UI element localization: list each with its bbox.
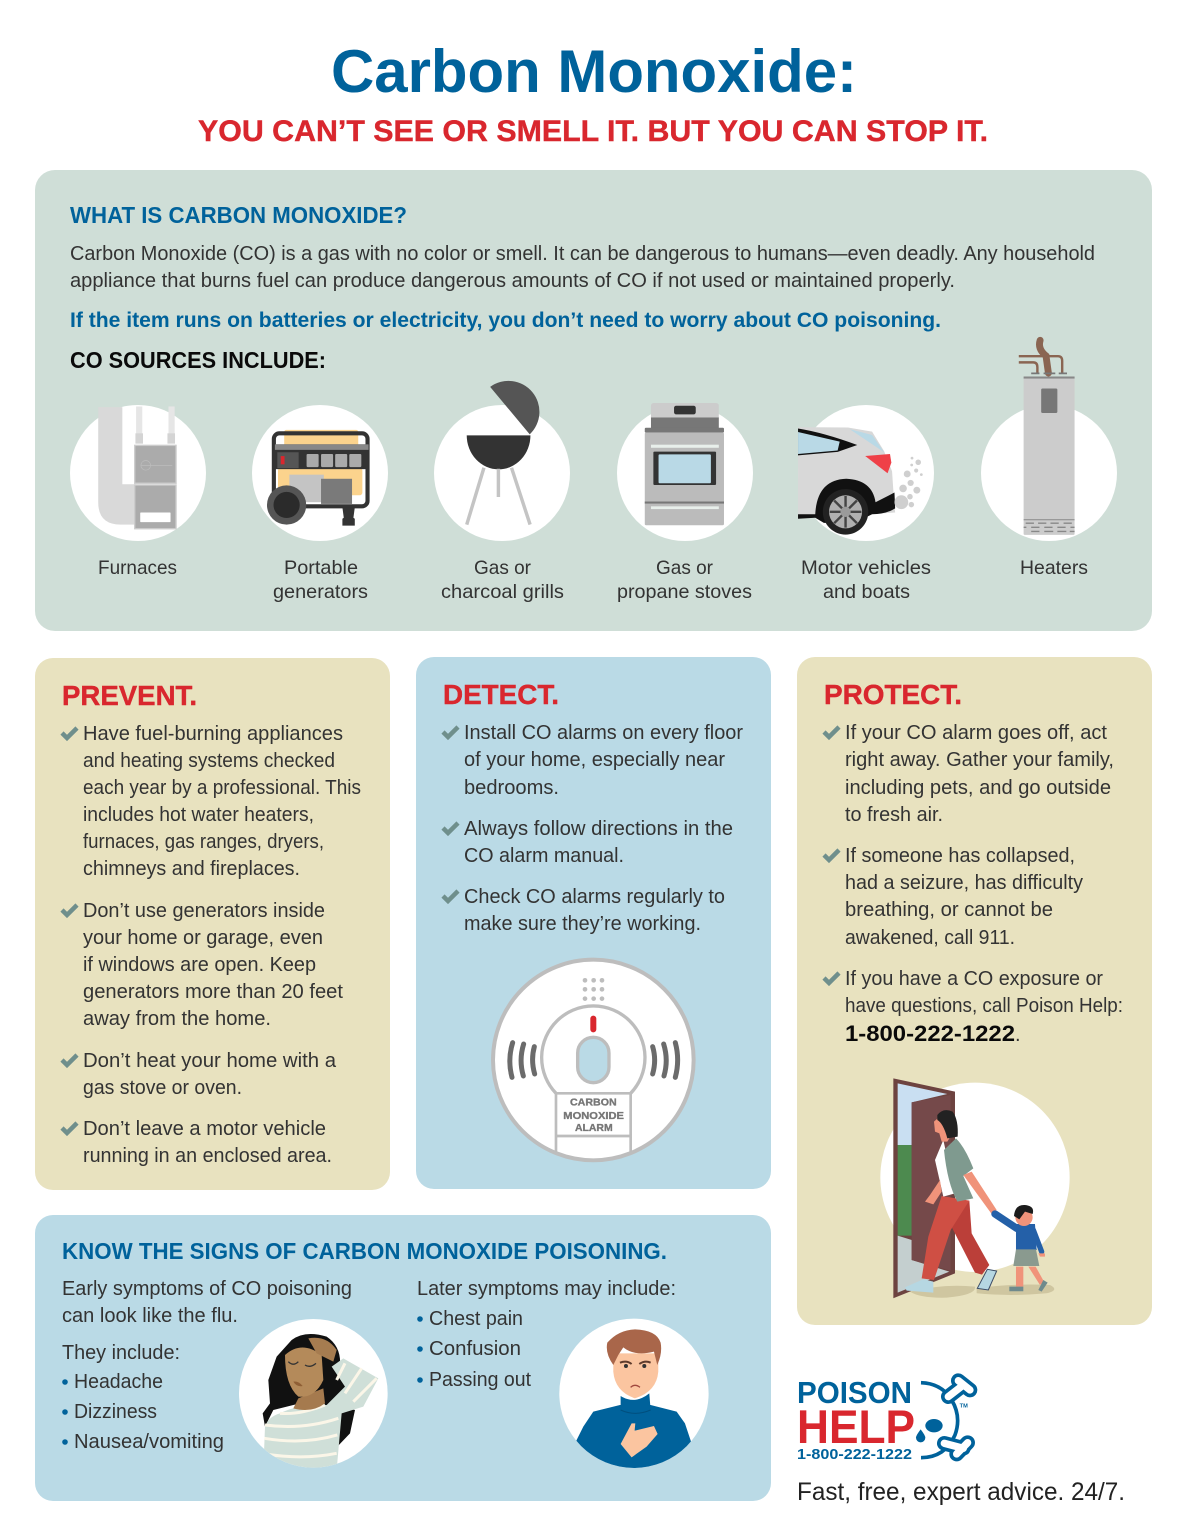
- icon: skull and crossbones: [916, 1381, 970, 1458]
- title: Carbon Monoxide:: [331, 38, 857, 105]
- checklist: prevent: Don’t leave a motor vehicle: [83, 1118, 326, 1140]
- label: stoves: [617, 557, 752, 603]
- checklist: protect: right away. Gather your family,: [845, 749, 1114, 771]
- label: portable generators: [273, 557, 368, 603]
- callout: batteries or electricity: If the item runs on batteries or electricity, you don’t need to worry about CO poisoning.: [70, 309, 941, 332]
- checklist: prevent: gas stove or oven.: [83, 1077, 242, 1099]
- panel: what is carbon monoxide: [35, 170, 1152, 631]
- checklist: prevent: includes hot water heaters,: [83, 804, 314, 826]
- illustration: carbon monoxide alarm: MONOXIDE: [563, 1111, 624, 1122]
- label: motor vehicles: Motor vehicles: [801, 557, 931, 579]
- label: portable generators: generators: [273, 581, 368, 603]
- text block: early symptoms: Dizziness: [74, 1401, 157, 1423]
- label: motor vehicles: [801, 557, 931, 603]
- checklist: protect: awakened, call 911.: [845, 927, 1015, 949]
- checklist: protect: 1-800-222-1222: [845, 1021, 1015, 1046]
- checklist: prevent: running in an enclosed area.: [83, 1145, 332, 1167]
- checklist: protect: including pets, and go outside: [845, 777, 1111, 799]
- text block: definition: [70, 243, 1095, 292]
- illustration: woman and child leaving through door: [880, 1078, 1070, 1298]
- checklist: prevent: Don’t heat your home with a: [83, 1050, 337, 1072]
- checklist: protect: had a seizure, has difficulty: [845, 872, 1083, 894]
- label: stoves: Gas or: [656, 557, 713, 579]
- heading: CO sources include: CO SOURCES INCLUDE:: [70, 347, 326, 373]
- logo: poison help: [797, 1375, 970, 1463]
- heading: know the signs: KNOW THE SIGNS OF CARBON MONOXIDE POISONING.: [62, 1238, 667, 1264]
- checklist: prevent: chimneys and fireplaces.: [83, 858, 300, 880]
- illustration: carbon monoxide alarm: CARBON: [570, 1098, 617, 1109]
- label: furnaces: Furnaces: [98, 557, 177, 579]
- checklist: detect: bedrooms.: [464, 777, 559, 799]
- source: portable generators: [252, 405, 388, 541]
- illustration: carbon monoxide alarm: ALARM: [575, 1123, 613, 1134]
- text block: later symptoms: Chest pain: [429, 1308, 523, 1330]
- source: gas or propane stoves: [617, 403, 753, 541]
- illustration: woman with headache: [239, 1319, 388, 1470]
- label: grills: charcoal grills: [441, 581, 564, 603]
- checklist: protect: If your CO alarm goes off, act: [845, 722, 1107, 744]
- panel: know the signs: [35, 1215, 771, 1501]
- checklist: prevent: Don’t use generators inside: [83, 900, 325, 922]
- text block: early symptoms: can look like the flu.: [62, 1305, 238, 1327]
- checklist: detect: make sure they’re working.: [464, 913, 701, 935]
- logo: poison help: HELP: [797, 1400, 915, 1453]
- text block: early symptoms: Early symptoms of CO poisoning: [62, 1278, 352, 1300]
- text block: later symptoms: Confusion: [429, 1338, 521, 1360]
- icon: skull and crossbones: TM: [960, 1403, 968, 1409]
- checklist: detect: Always follow directions in the: [464, 818, 733, 840]
- checklist: protect: If you have a CO exposure or: [845, 968, 1103, 990]
- checklist: prevent: if windows are open. Keep: [83, 954, 316, 976]
- text block: definition: appliance that burns fuel can produce dangerous amounts of CO if not used or maintained properly.: [70, 270, 955, 292]
- checklist: detect: of your home, especially near: [464, 749, 725, 771]
- text block: later symptoms: [417, 1278, 676, 1391]
- panel: detect: [416, 657, 771, 1189]
- heading: what is carbon monoxide: WHAT IS CARBON MONOXIDE?: [70, 202, 407, 228]
- illustration: carbon monoxide alarm: [493, 960, 694, 1160]
- source: motor vehicles and boats: [798, 405, 934, 541]
- checklist: protect: .: [1015, 1024, 1021, 1046]
- checklist: protect: to fresh air.: [845, 804, 943, 826]
- checklist: prevent: Have fuel-burning appliances: [83, 723, 343, 745]
- checklist: detect: Install CO alarms on every floor: [464, 722, 743, 744]
- label: heaters: Heaters: [1020, 557, 1088, 579]
- text block: later symptoms: Passing out: [429, 1369, 531, 1391]
- text block: later symptoms: Later symptoms may include:: [417, 1278, 676, 1300]
- heading: prevent: PREVENT.: [62, 680, 197, 711]
- checklist: prevent: your home or garage, even: [83, 927, 323, 949]
- checklist: detect: [443, 722, 743, 935]
- text block: early symptoms: Nausea/vomiting: [74, 1431, 224, 1453]
- illustration: man with chest pain: [559, 1319, 709, 1470]
- tagline: Fast, free, expert advice. 24/7.: [797, 1478, 1125, 1506]
- checklist: prevent: furnaces, gas ranges, dryers,: [83, 831, 324, 853]
- checklist: protect: [824, 722, 1123, 1046]
- label: stoves: propane stoves: [617, 581, 752, 603]
- panel: protect: [797, 657, 1152, 1325]
- source: gas or charcoal grills: [434, 381, 570, 541]
- text block: early symptoms: They include:: [62, 1342, 180, 1364]
- text block: early symptoms: Headache: [74, 1371, 163, 1393]
- checklist: detect: CO alarm manual.: [464, 845, 624, 867]
- source: furnaces: [70, 405, 206, 541]
- label: grills: [441, 557, 564, 603]
- heading: detect: DETECT.: [443, 679, 559, 710]
- checklist: prevent: generators more than 20 feet: [83, 981, 343, 1003]
- panel: prevent: [35, 658, 390, 1190]
- checklist: protect: breathing, or cannot be: [845, 899, 1053, 921]
- checklist: prevent: and heating systems checked: [83, 750, 335, 772]
- checklist: prevent: each year by a professional. This: [83, 777, 361, 799]
- source: heaters: [981, 340, 1117, 541]
- subtitle: YOU CAN’T SEE OR SMELL IT. BUT YOU CAN STOP IT.: [198, 115, 988, 148]
- checklist: protect: If someone has collapsed,: [845, 845, 1075, 867]
- label: grills: Gas or: [474, 557, 531, 579]
- logo: poison help: 1-800-222-1222: [797, 1446, 912, 1463]
- checklist: prevent: away from the home.: [83, 1008, 271, 1030]
- logo: poison help: POISON: [797, 1375, 912, 1410]
- heading: protect: PROTECT.: [824, 679, 962, 710]
- checklist: detect: Check CO alarms regularly to: [464, 886, 725, 908]
- label: motor vehicles: and boats: [823, 581, 910, 603]
- text block: early symptoms: [62, 1278, 352, 1453]
- checklist: protect: have questions, call Poison Help:: [845, 995, 1123, 1017]
- checklist: prevent: [62, 723, 361, 1167]
- label: portable generators: Portable: [284, 557, 358, 579]
- text block: definition: Carbon Monoxide (CO) is a gas with no color or smell. It can be dangerous to humans—even deadly. Any household: [70, 243, 1095, 265]
